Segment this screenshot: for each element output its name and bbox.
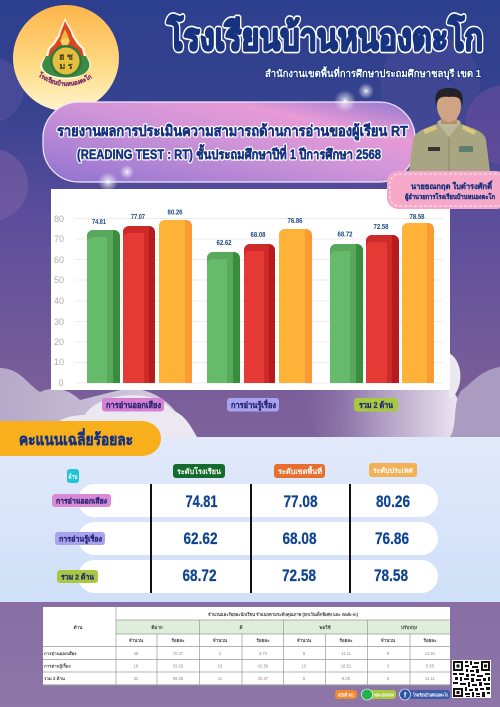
table text: 14.81 xyxy=(425,651,436,656)
column header chips: ระดับเขตพื้นที่ xyxy=(278,465,322,476)
contact chips xyxy=(335,689,450,700)
table text: 3.70 xyxy=(259,651,268,656)
bars: รวม 2 ด้าน: 78.58 xyxy=(410,214,425,221)
table text: จำนวนและร้อยละนักเรียน จำแนกตามระดับคุณภาพ (ยกเว้นเด็กพิเศษ และ Walk-in) xyxy=(208,610,358,618)
table text: จำนวน xyxy=(129,637,144,643)
table text: ร้อยละ xyxy=(423,637,437,643)
contact chips: ฉบับที่ 301 xyxy=(338,692,354,698)
heading tab xyxy=(0,421,161,456)
table text: ร้อยละ xyxy=(171,637,185,643)
score values: 74.81 xyxy=(186,492,218,511)
name plate: นายธณกฤต ใบดำรงศักดิ์ xyxy=(411,180,493,191)
chart category labels: การอ่านออกเสียง xyxy=(106,400,161,410)
banner xyxy=(43,90,415,192)
score values xyxy=(182,492,410,585)
column header chips: ระดับประเทศ xyxy=(373,466,413,475)
table text: 6 xyxy=(387,676,390,681)
score rows xyxy=(78,484,438,593)
table text: จำนวน xyxy=(297,637,312,643)
table text: 11.11 xyxy=(341,651,352,656)
table text: ร้อยละ xyxy=(256,637,270,643)
bars: การอ่านออกเสียง: 74.81 xyxy=(92,219,106,226)
row label chips: การอ่านรู้เรื่อง xyxy=(59,532,102,544)
table text: 59.25 xyxy=(173,676,184,681)
bars: รวม 2 ด้าน xyxy=(330,214,434,383)
portrait of director xyxy=(409,88,490,172)
y axis labels: 0 xyxy=(58,378,64,388)
table text: จำนวน xyxy=(213,637,228,643)
chart category labels: รวม 2 ด้าน xyxy=(359,400,393,410)
table text: 9.25 xyxy=(342,676,351,681)
table text: 23 xyxy=(218,664,223,668)
bars: รวม 2 ด้าน: 68.72 xyxy=(338,232,353,238)
school logo: ฮ ช xyxy=(59,52,73,62)
y axis labels: 60 xyxy=(54,255,64,265)
table text: 32 xyxy=(134,676,139,681)
column header chips: ระดับโรงเรียน xyxy=(177,466,222,476)
chart category labels xyxy=(102,398,398,412)
table text: 5.55 xyxy=(426,664,435,668)
chart category labels: การอ่านรู้เรื่อง xyxy=(231,398,276,411)
table text: 42.59 xyxy=(258,664,269,668)
table text: 6 xyxy=(303,651,306,656)
table text: การอ่านออกเสียง xyxy=(44,651,76,656)
sparkle xyxy=(358,83,374,99)
table text: 5 xyxy=(303,676,306,681)
row label chips: รวม 2 ด้าน xyxy=(61,572,95,582)
score values: 68.72 xyxy=(182,566,216,585)
banner title line 1: รายงานผลการประเมินความสามารถด้านการอ่านของผู้เรียน RT xyxy=(57,122,408,141)
table text: 2 xyxy=(219,651,222,656)
bars: รวม 2 ด้าน: 72.58 xyxy=(374,224,389,231)
banner title line 2: (READING TEST : RT) ชั้นประถมศึกษาปีที่ 1 ปีการศึกษา 2568 xyxy=(77,144,381,162)
y axis labels: 80 xyxy=(54,214,64,224)
score values: 62.62 xyxy=(184,529,218,548)
table text: ดี xyxy=(239,624,243,630)
score values: 78.58 xyxy=(374,566,408,585)
table grid xyxy=(43,607,450,685)
table text: ด้าน xyxy=(74,624,83,630)
y axis labels: 10 xyxy=(54,357,64,367)
y axis labels: 30 xyxy=(54,317,64,327)
contact chips: f xyxy=(404,692,407,700)
column header chips xyxy=(67,463,417,483)
QR code xyxy=(452,660,491,698)
y axis labels xyxy=(54,214,64,388)
table text: จำนวน xyxy=(381,637,396,643)
row label chips xyxy=(52,494,111,583)
table text: 18 xyxy=(134,664,139,668)
table text: 18.51 xyxy=(341,664,352,668)
score values: 76.86 xyxy=(375,529,409,548)
bars: การอ่านออกเสียง xyxy=(87,210,192,383)
table text: ดีมาก xyxy=(151,624,163,630)
bars: การอ่านรู้เรื่อง: 62.62 xyxy=(216,240,232,247)
banner title line 1: รายงานผลการประเมินความสามารถด้านการอ่านของผู้เรียน RT xyxy=(57,122,408,141)
table text: ปรับปรุง xyxy=(401,624,418,631)
row label chips: การอ่านออกเสียง xyxy=(56,496,107,506)
bars: การอ่านรู้เรื่อง: 76.86 xyxy=(288,218,303,225)
table text: 11 xyxy=(218,676,223,681)
heading tab: คะแนนเฉลี่ยร้อยละ xyxy=(19,428,133,449)
table text: 38 xyxy=(134,651,139,656)
bars: การอ่านออกเสียง: 77.07 xyxy=(131,214,145,221)
contact chips: 089-2905586 xyxy=(374,692,394,698)
y axis gridlines xyxy=(75,218,443,383)
table text: 70.37 xyxy=(173,651,184,656)
contact chips: โรงเรียนบ้านหนองตะโก xyxy=(412,692,448,698)
table text: 20.37 xyxy=(258,676,269,681)
school logo xyxy=(13,5,119,110)
table text: รวม 2 ด้าน xyxy=(44,675,65,681)
chart panel xyxy=(51,189,450,390)
banner title line 2: (READING TEST : RT) ชั้นประถมศึกษาปีที่ 1 ปีการศึกษา 2568 xyxy=(77,144,381,162)
clouds behind panels xyxy=(0,353,500,437)
table text: พอใช้ xyxy=(318,624,331,630)
panel: average score xyxy=(0,437,500,602)
table text: 10 xyxy=(302,664,307,668)
subtitle: สำนักงานเขตพื้นที่การศึกษาประถมศึกษาชลบุรี เขต 1 xyxy=(265,66,481,80)
quality table xyxy=(43,607,450,685)
y axis labels: 20 xyxy=(54,337,64,347)
table text: 8 xyxy=(387,651,390,656)
bars: การอ่านออกเสียง: 80.26 xyxy=(168,210,183,216)
name plate xyxy=(387,171,500,209)
table text: การอ่านรู้เรื่อง xyxy=(44,662,71,670)
y axis labels: 50 xyxy=(54,275,64,285)
y axis labels: 40 xyxy=(54,296,64,306)
y axis labels: 70 xyxy=(54,234,64,244)
table header fill xyxy=(116,620,450,634)
score values: 72.58 xyxy=(282,566,316,585)
column separators xyxy=(150,484,351,593)
score values: 77.08 xyxy=(284,492,318,511)
table text xyxy=(44,610,437,681)
column header chips: ด้าน xyxy=(68,472,78,481)
score values: 80.26 xyxy=(376,492,410,511)
table text: 3 xyxy=(387,664,390,668)
score values: 68.08 xyxy=(282,529,316,548)
bars: การอ่านรู้เรื่อง xyxy=(207,218,312,383)
school logo: โรงเรียนบ้านหนองตะโก xyxy=(39,71,92,86)
table text: ร้อยละ xyxy=(339,637,353,643)
table text: 11.11 xyxy=(425,676,436,681)
table text: 33.33 xyxy=(173,664,184,668)
bars: การอ่านรู้เรื่อง: 68.08 xyxy=(250,232,266,239)
school logo: ม ร xyxy=(59,61,73,71)
